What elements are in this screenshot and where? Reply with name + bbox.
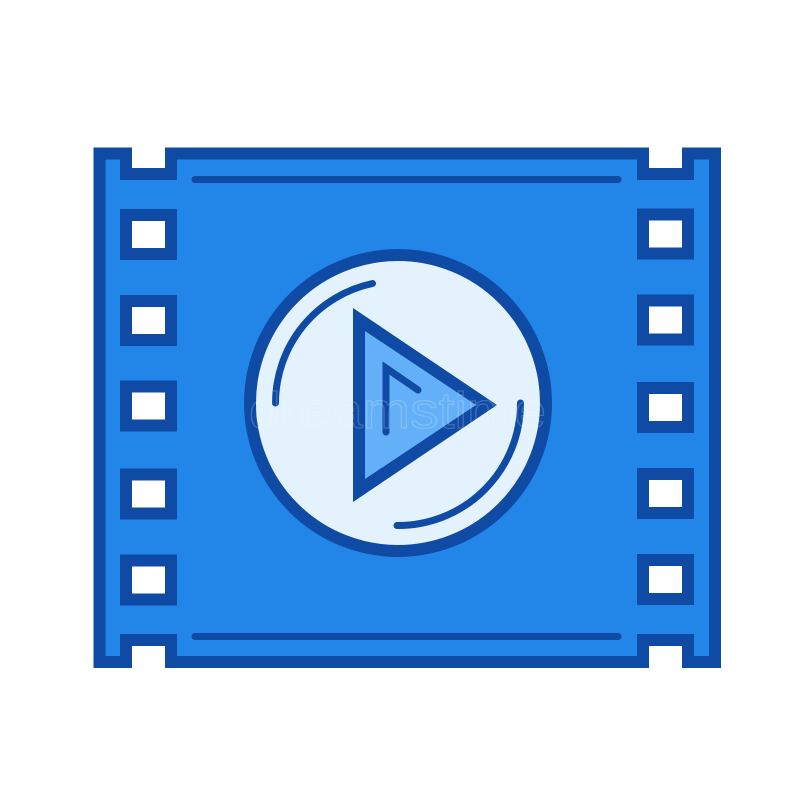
play button circle [250, 255, 546, 551]
watermark text: dreamstime [249, 382, 546, 439]
triangle inner highlight [386, 368, 418, 432]
film strip body [100, 154, 715, 662]
upper left arc highlight [276, 284, 372, 403]
right sprocket holes [643, 214, 688, 599]
left sprocket holes [126, 215, 171, 600]
lower right arc highlight [397, 403, 520, 526]
bottom film line [195, 633, 618, 640]
play triangle [353, 308, 497, 502]
top film line [195, 176, 618, 183]
